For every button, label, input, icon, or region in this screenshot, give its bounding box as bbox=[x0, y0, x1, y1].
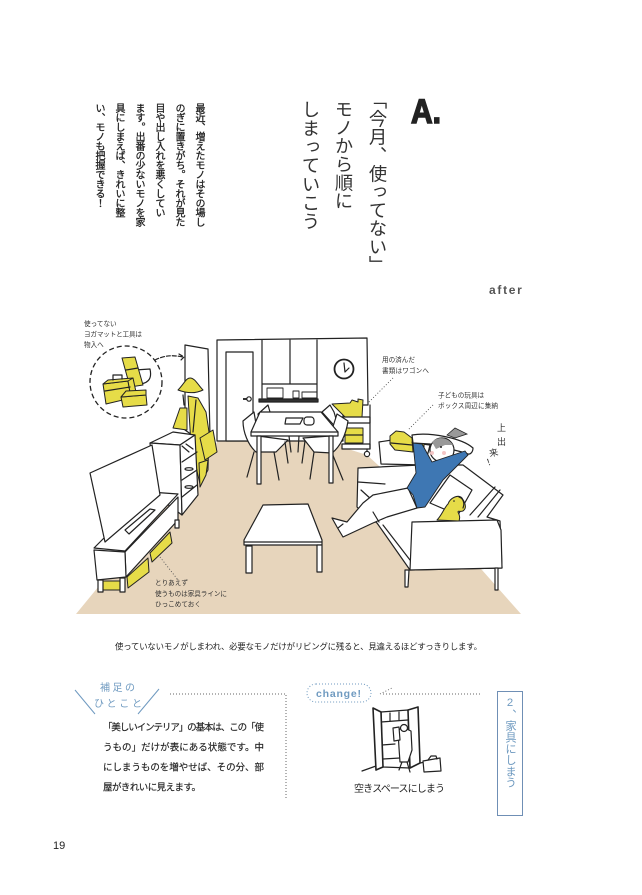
annotation: documents bbox=[382, 356, 429, 375]
back wall with door and cupboards bbox=[217, 338, 368, 441]
coffee table bbox=[244, 504, 322, 573]
note text: 屋がきれいに見えます。 bbox=[103, 782, 201, 794]
annotation: yoga mat bbox=[84, 319, 142, 349]
intro text: vertical body copy bbox=[93, 103, 206, 227]
exclamation: 上出来！: ！ bbox=[483, 456, 495, 469]
title: vertical heading bbox=[300, 91, 388, 274]
caption: empty space: 空きスペースにしまう bbox=[354, 783, 445, 795]
woman relaxing on the sofa bbox=[332, 428, 473, 537]
heading: 補足のひとこと: ひとこと bbox=[94, 698, 142, 710]
sofa bbox=[357, 465, 503, 590]
annotation: furniture line: とりあえず bbox=[155, 578, 188, 587]
intro text: vertical body copy: ます。出番の少ないモノを家 bbox=[133, 103, 144, 226]
caption under illustration: 使っていないモノがしまわれ、必要なモノだけがリビングに残ると、見違えるほどすっきりします。 bbox=[115, 642, 482, 652]
dashed bubble: storage items bbox=[90, 346, 184, 418]
side table with yellow toy bags bbox=[379, 431, 430, 465]
closet door bbox=[185, 345, 210, 437]
annotation: furniture line bbox=[155, 578, 227, 608]
annotation: toys bbox=[438, 392, 498, 410]
annotation: furniture line: ひっこめておく bbox=[155, 600, 201, 608]
annotation: yoga mat: ヨガマットと工具は bbox=[84, 330, 142, 338]
badge: change! bbox=[307, 684, 371, 702]
heading: A.: A. bbox=[411, 93, 441, 131]
wagon with yellow files bbox=[332, 399, 370, 457]
label: after: after bbox=[489, 283, 524, 297]
exclamation: 上出来！: 出 bbox=[497, 436, 506, 447]
annotation: toys: ボックス周辺に集納 bbox=[438, 401, 498, 410]
section tab frame bbox=[498, 692, 522, 816]
note text: にしまうものを増やせば、その分、部 bbox=[103, 762, 264, 774]
intro text: vertical body copy: のぎに置きがち。それが見た bbox=[173, 103, 184, 226]
storage shelf unit bbox=[150, 432, 198, 515]
note text bbox=[103, 722, 264, 794]
coat rack with yellow coat, hat and bags bbox=[173, 378, 217, 487]
note text: うもの」だけが表にある状態です。中 bbox=[103, 742, 264, 754]
dog plush bbox=[437, 496, 465, 521]
annotation: yoga mat: 使ってない bbox=[84, 319, 117, 328]
icon: wall clock bbox=[334, 360, 354, 378]
intro text: vertical body copy: 目や出し入れを悪くしてい bbox=[153, 103, 164, 217]
exclamation: 上出来！: 上 bbox=[497, 423, 506, 433]
annotation: furniture line: 使うものは家具ラインに bbox=[155, 589, 227, 598]
intro text: vertical body copy: 具にしまえば、きれいに整 bbox=[113, 103, 124, 217]
note text: 「美しいインテリア」の基本は、この「使 bbox=[103, 722, 264, 734]
icon: person at closet bbox=[362, 707, 441, 772]
dining chairs bbox=[243, 405, 348, 480]
heading: 補足のひとこと: 補足の bbox=[100, 681, 135, 694]
page number: 19 bbox=[53, 840, 65, 852]
annotation: documents: 用の済んだ bbox=[382, 356, 415, 364]
annotation: toys: 子どもの玩具は bbox=[438, 392, 485, 400]
heading: 補足のひとこと bbox=[75, 681, 159, 714]
section tab text: 2、家具にしまう bbox=[504, 697, 516, 788]
floor bbox=[76, 441, 521, 614]
annotation leader lines bbox=[160, 378, 433, 580]
intro text: vertical body copy: い、モノも把握できる！ bbox=[93, 103, 104, 208]
dotted leader: change bbox=[380, 688, 482, 694]
television bbox=[90, 445, 160, 542]
annotation: documents: 書類はワゴンへ bbox=[382, 366, 429, 375]
exclamation: 上出来！: 来 bbox=[488, 447, 499, 459]
exclamation: 上出来！ bbox=[483, 423, 506, 469]
badge: change!: change! bbox=[316, 688, 361, 700]
title line 2: モノから順に bbox=[333, 100, 354, 210]
annotation: yoga mat: 物入へ bbox=[84, 340, 104, 349]
intro text: vertical body copy: 最近、増えたモノはその場し bbox=[193, 103, 204, 226]
dotted frame: note bbox=[170, 694, 286, 798]
dining table bbox=[251, 412, 338, 484]
title line 1: 「今月、使ってない」 bbox=[367, 91, 388, 274]
TV board with yellow drawers bbox=[94, 492, 179, 592]
title line 3: しまっていこう bbox=[300, 100, 321, 231]
